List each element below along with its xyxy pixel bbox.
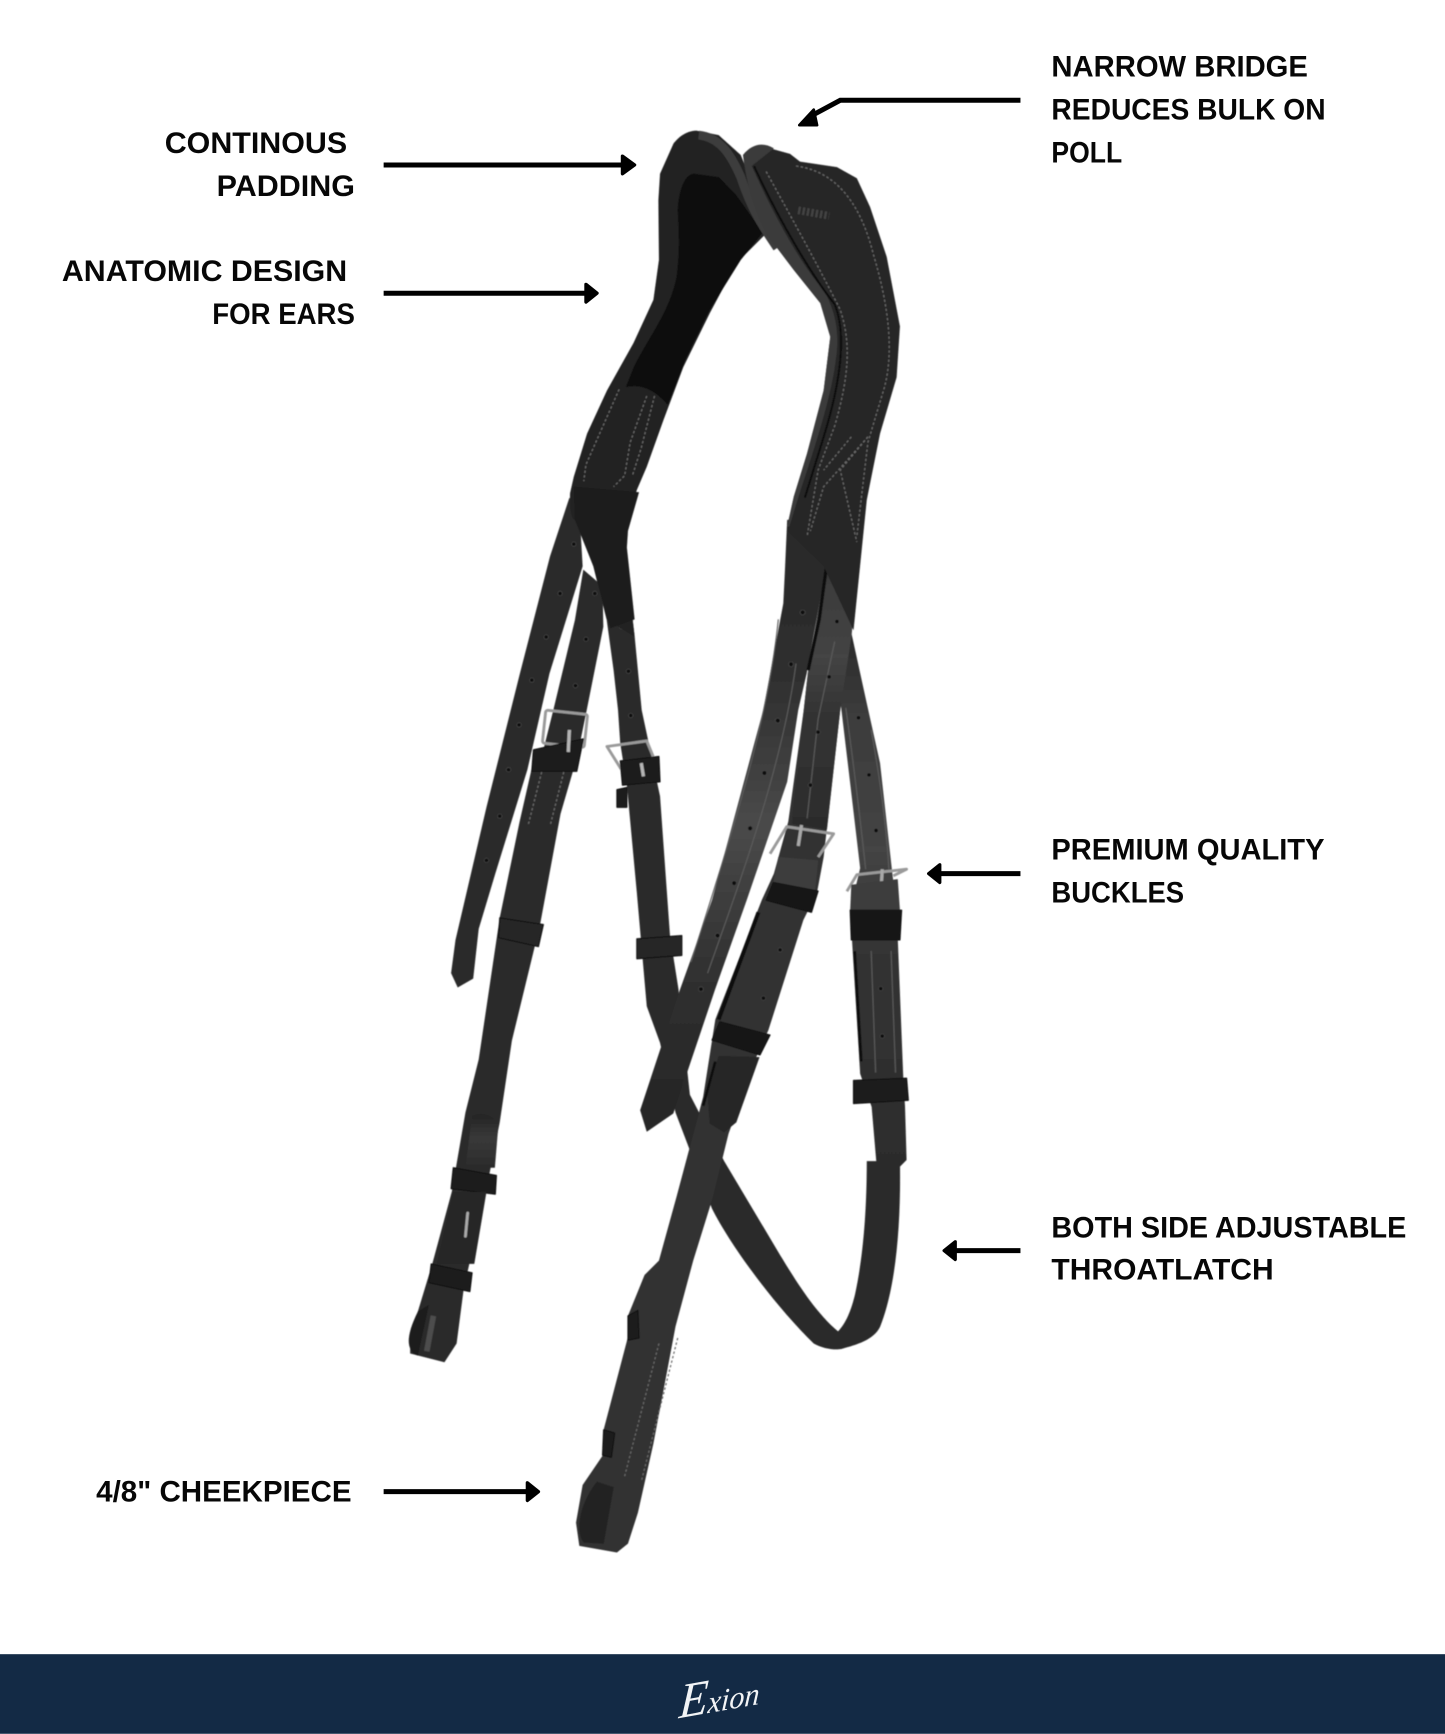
left side of padded headpiece: [570, 131, 777, 637]
label: anatomic design for ears: ANATOMIC DESIGN: [62, 255, 347, 288]
left buckle assembly: [532, 710, 660, 807]
arrow: anatomic design: [384, 284, 597, 302]
left cheekpiece with loop end: [409, 570, 633, 1362]
arrow: narrow bridge: [799, 100, 1020, 125]
label: narrow bridge: POLL: [1051, 137, 1122, 170]
label: continous padding: CONTINOUS: [165, 127, 347, 160]
strap: long centre free end: [640, 520, 827, 1132]
centre and right buckles with keepers: [712, 825, 908, 1104]
throatlatch strap: right upper section: [840, 633, 907, 1177]
label: both side adjustable throatlatch: [1051, 1211, 1406, 1286]
product illustration: padded headpiece with straps: [409, 131, 908, 1552]
arrow: buckles: [929, 865, 1020, 882]
label: cheekpiece: 4/8" CHEEKPIECE: [96, 1476, 352, 1509]
label: anatomic design for ears: [62, 255, 355, 331]
arrow: cheekpiece: [384, 1483, 538, 1501]
footer logo: Exion: Exion: [677, 1660, 762, 1730]
right side of padded headpiece: [743, 145, 900, 630]
label: narrow bridge: [1051, 51, 1326, 170]
label: continous padding: PADDING: [217, 170, 355, 203]
strap: left free end: [451, 498, 583, 988]
label: premium quality buckles: [1051, 833, 1325, 909]
arrow: continous padding: [384, 156, 635, 174]
label: premium quality buckles: BUCKLES: [1051, 876, 1184, 909]
label: premium quality buckles: PREMIUM QUALITY: [1051, 833, 1325, 866]
right cheekpiece with loop end: [576, 531, 862, 1552]
arrow: throatlatch: [944, 1242, 1020, 1259]
label: continous padding: [165, 127, 355, 203]
label: narrow bridge: REDUCES BULK ON: [1051, 94, 1326, 127]
label: anatomic design for ears: FOR EARS: [212, 298, 355, 331]
footer band: [0, 1654, 1445, 1734]
lower keepers on left straps: [499, 918, 682, 959]
label: both side adjustable throatlatch: BOTH SIDE ADJUSTABLE: [1051, 1211, 1406, 1244]
label: narrow bridge: NARROW BRIDGE: [1051, 51, 1308, 84]
throatlatch strap: left side and lower curve: [575, 513, 900, 1349]
label: both side adjustable throatlatch: THROATLATCH: [1051, 1253, 1274, 1286]
